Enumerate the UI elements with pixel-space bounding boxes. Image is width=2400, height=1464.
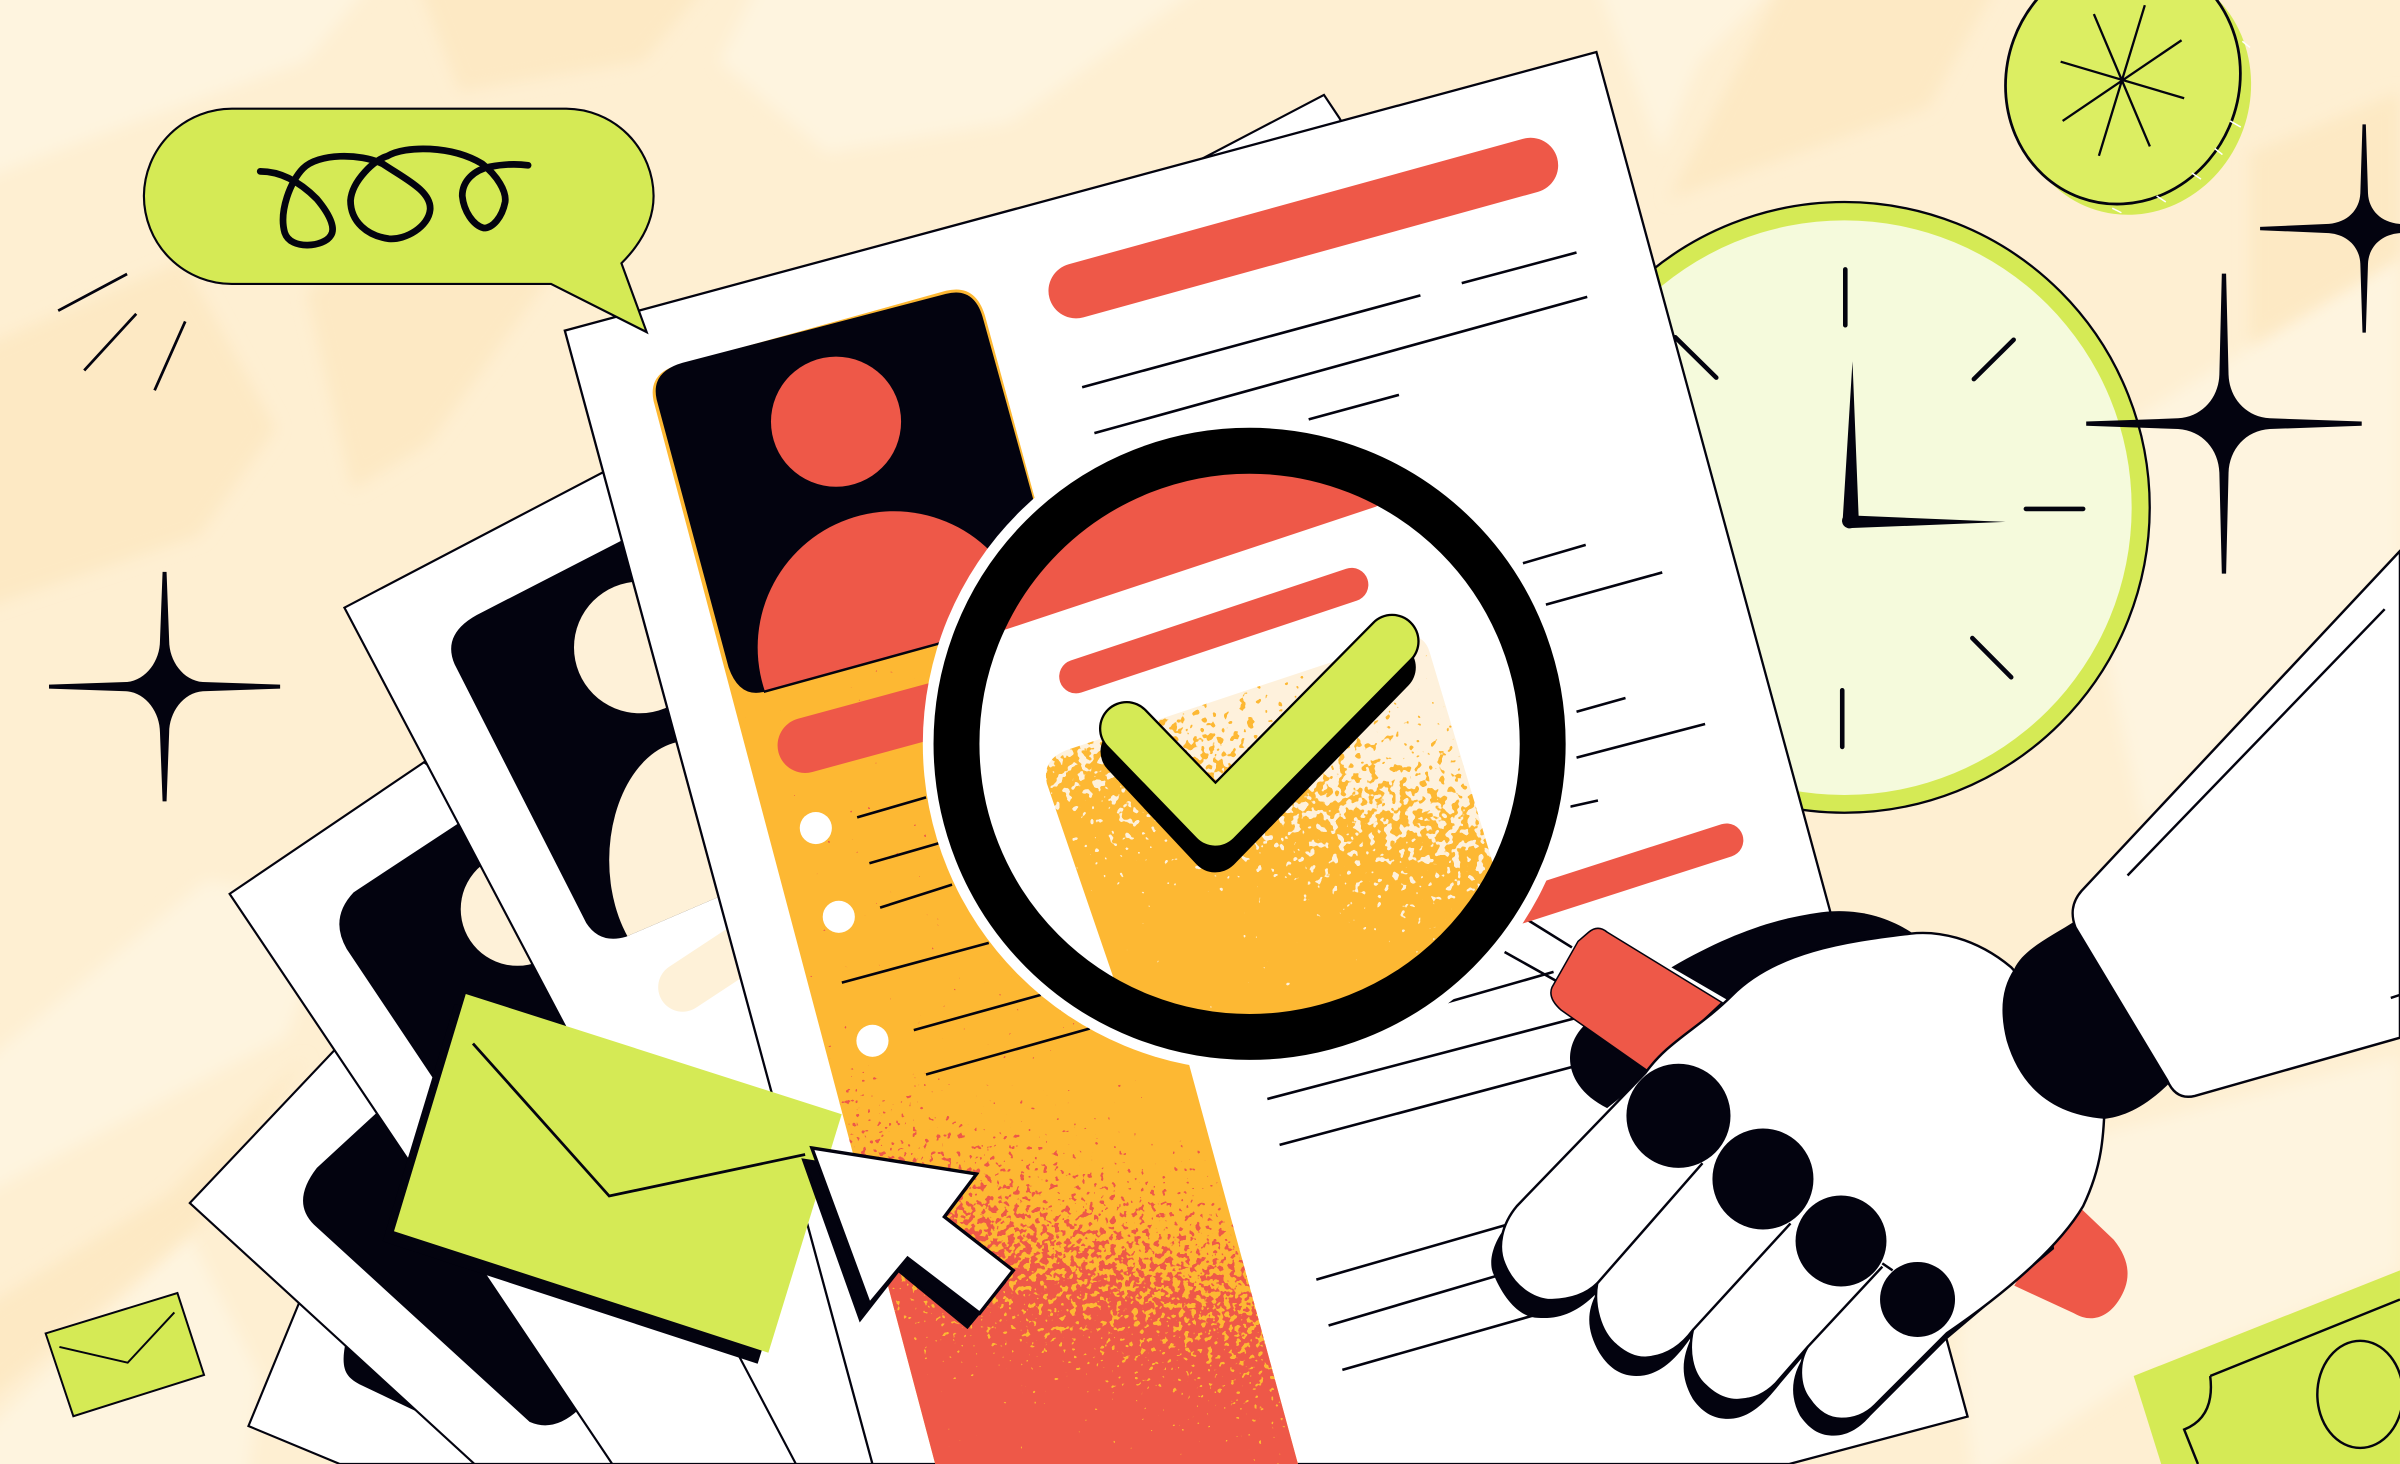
sidebar column with gradient bbox=[652, 290, 1298, 1464]
pale text bar bbox=[683, 943, 750, 987]
fingernails bbox=[1626, 1064, 1955, 1337]
magnifier bbox=[918, 398, 1576, 1071]
finger separators bbox=[1597, 1163, 1893, 1347]
icon: sparkle left bbox=[49, 572, 280, 801]
document: third sheet bbox=[230, 762, 857, 1464]
palm and fingers bbox=[1501, 933, 2105, 1419]
small envelope bbox=[46, 1293, 204, 1416]
clock hands bbox=[1842, 361, 2006, 528]
icon: lime coin top right bbox=[1971, 0, 2286, 248]
icon: sparkle upper right bbox=[2260, 124, 2400, 333]
pen tail bbox=[2014, 1209, 2128, 1318]
document: bottom sheet bbox=[248, 1286, 643, 1464]
sidebar heading bar bbox=[805, 698, 980, 745]
text lines bbox=[1082, 253, 1705, 1370]
photo block bbox=[656, 292, 1034, 693]
wrist bbox=[2002, 920, 2169, 1119]
cursor arrow bbox=[804, 1148, 1013, 1327]
hand holding pen bbox=[1491, 551, 2400, 1436]
banknote bbox=[2134, 1270, 2400, 1464]
lens ring bbox=[956, 451, 1543, 1037]
clock ticks bbox=[1675, 269, 2083, 747]
scribble bbox=[260, 149, 528, 245]
large envelope bbox=[383, 994, 842, 1364]
bullet dots bbox=[800, 812, 889, 1057]
shirt cuff bbox=[2073, 551, 2400, 1097]
check mark bbox=[1127, 641, 1392, 846]
photo on second sheet bbox=[451, 541, 718, 939]
bubble rays bbox=[58, 274, 185, 390]
finger shadows bbox=[1491, 1163, 2054, 1436]
document: main resume sheet bbox=[565, 52, 1968, 1464]
lens contents bbox=[1004, 474, 1492, 1014]
document: fourth sheet bbox=[190, 918, 857, 1464]
pen body bbox=[1551, 928, 1722, 1071]
title bar bbox=[1076, 165, 1531, 291]
icon: sparkle middle right bbox=[2086, 274, 2362, 574]
section bar bbox=[1469, 840, 1727, 923]
sidebar lines bbox=[842, 797, 1090, 1074]
document: second sheet bbox=[343, 94, 1342, 1464]
clock bbox=[1539, 202, 2150, 813]
thumb shadow lobes bbox=[1671, 911, 1913, 1010]
speech bubble bbox=[144, 109, 654, 332]
